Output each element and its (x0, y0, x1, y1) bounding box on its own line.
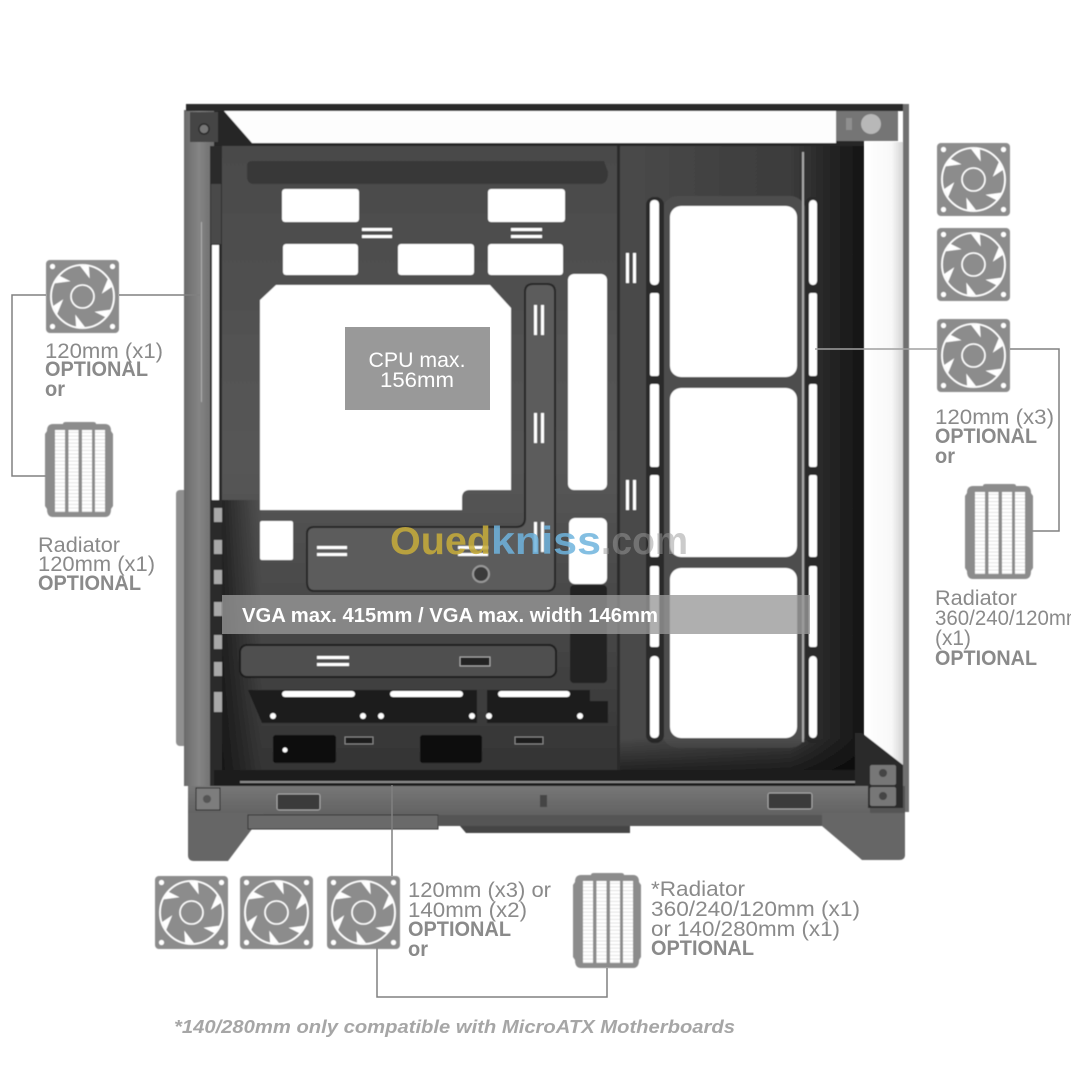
left radiator label (38, 534, 155, 595)
bottom black openings (273, 735, 543, 763)
bottom fan label: OPTIONAL (408, 918, 511, 941)
right fan label: OPTIONAL (935, 425, 1037, 448)
tie slots (362, 228, 542, 238)
left fan label: 120mm (x1) (45, 340, 163, 363)
right radiator label (936, 590, 1071, 665)
underside trim (248, 815, 822, 833)
right radiator label: Radiator (935, 587, 1017, 610)
watermark (390, 520, 688, 563)
panel: PC case (176, 104, 909, 861)
icon: right radiator (965, 484, 1033, 579)
watermark: Oued (390, 520, 491, 563)
callout: VGA limits: VGA max. 415mm / VGA max. width 146mm (242, 605, 658, 627)
icon: bottom fan 3 (327, 876, 400, 949)
left radiator label: OPTIONAL (38, 572, 141, 595)
top rectangular cutouts (282, 189, 565, 275)
callout: CPU max height: 156mm (380, 369, 454, 392)
motherboard tray panel (222, 146, 618, 776)
top rail (247, 161, 608, 184)
left radiator label: 120mm (x1) (38, 553, 155, 576)
right fan label (935, 406, 1054, 468)
mount frame (662, 196, 806, 748)
CPU cutout (260, 285, 511, 510)
group: right fan and radiator options (935, 143, 1080, 670)
bottom radiator label (651, 878, 860, 960)
right radiator label: (x1) (935, 627, 971, 650)
icon: left fan (46, 260, 119, 333)
watermark: kniss (491, 520, 601, 563)
left fan label: or (45, 378, 65, 401)
footnote: *140/280mm only compatible with MicroATX Motherboards (174, 1017, 735, 1037)
callout: VGA limits (222, 595, 810, 634)
left foot (188, 813, 264, 861)
group: bottom fan and radiator options (155, 873, 860, 968)
tie slots (626, 253, 636, 510)
right slot rail (805, 197, 821, 743)
icon: bottom fan 1 (155, 876, 228, 949)
right fan label: 120mm (x3) (935, 406, 1054, 429)
top right bracket (836, 111, 898, 141)
left dark edge (210, 146, 233, 786)
icon: right fan 1 (937, 143, 1010, 216)
strip and plate ties (317, 305, 544, 556)
right fan label: or (935, 445, 955, 468)
bottom radiator label: *Radiator (651, 878, 745, 901)
bottom right corner (855, 733, 903, 808)
icon: bottom fan 2 (240, 876, 313, 949)
callout: CPU max height (345, 327, 490, 410)
right radiator label: OPTIONAL (935, 647, 1037, 670)
case left side column (176, 110, 214, 786)
bottom fan label: 120mm (x3) or (408, 879, 551, 902)
cable strip and lower plate (307, 284, 555, 591)
bottom fan label: or (408, 938, 428, 961)
case top frame (186, 104, 909, 812)
right glass strip (865, 142, 903, 772)
left slot rail (646, 197, 664, 743)
lower plate (240, 645, 556, 677)
fan mount cutouts (670, 206, 797, 738)
small square cutout (260, 521, 293, 560)
icon: bottom radiator (573, 873, 641, 968)
group: left fan and radiator options (38, 260, 163, 595)
bottom fan label (408, 879, 551, 961)
icon: left radiator (45, 422, 113, 517)
dark floor band (214, 770, 864, 787)
watermark: .com (601, 520, 688, 563)
left radiator label: Radiator (38, 534, 120, 557)
expansion slot openings (248, 690, 608, 723)
bottom fan label: 140mm (x2) (408, 899, 527, 922)
base rail (188, 786, 905, 815)
right column cutouts (568, 274, 607, 683)
left fan label: OPTIONAL (45, 358, 148, 381)
callout: CPU max height: CPU max. (368, 349, 466, 372)
top glass strip (224, 111, 836, 143)
bottom radiator label: or 140/280mm (x1) (651, 918, 840, 941)
right foot (822, 813, 905, 860)
left fan label (45, 340, 163, 401)
bottom radiator label: OPTIONAL (651, 937, 754, 960)
icon: right fan 3 (937, 319, 1010, 392)
icon: right fan 2 (937, 228, 1010, 301)
leader lines (12, 295, 1059, 997)
rear fan mount panel (617, 146, 864, 772)
bottom radiator label: 360/240/120mm (x1) (651, 898, 860, 921)
